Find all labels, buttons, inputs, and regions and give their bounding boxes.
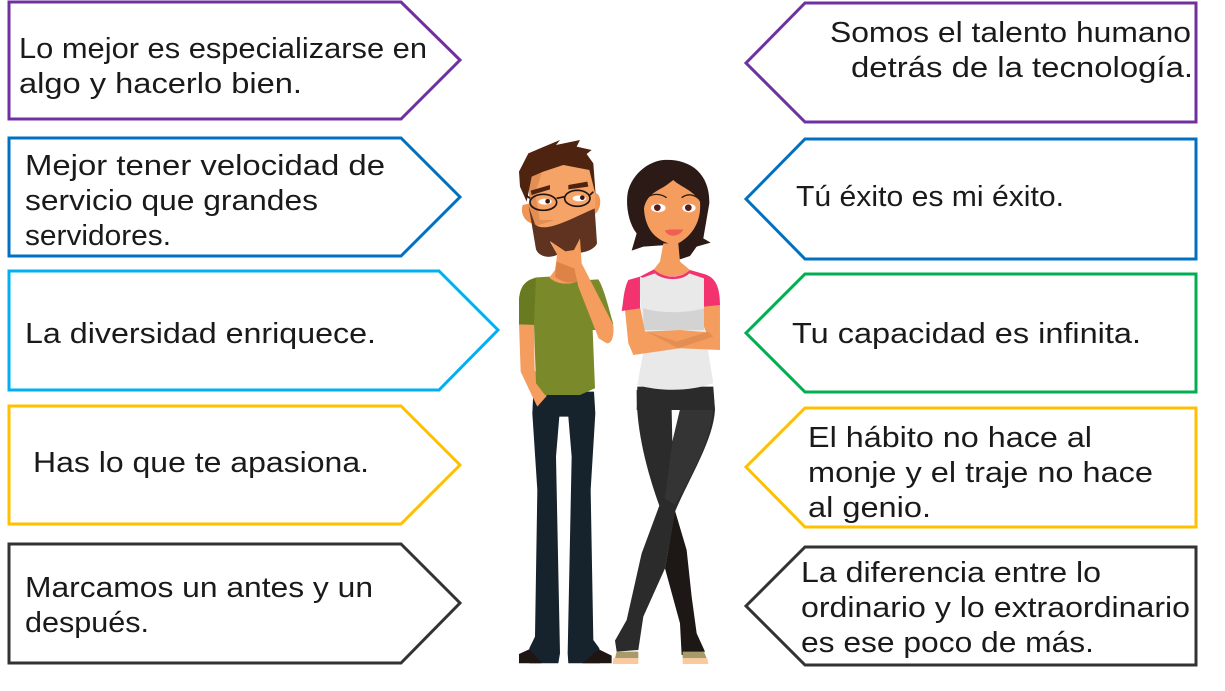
illustration: man with beard	[519, 140, 614, 663]
panel: talento humano arrow: Somos el talento humano	[830, 17, 1191, 49]
panel: antes y despues arrow	[9, 544, 460, 663]
panel: extraordinario arrow: La diferencia entre lo	[801, 557, 1101, 589]
panel: velocidad arrow: Mejor tener velocidad de	[25, 150, 385, 182]
panel: antes y despues arrow: después.	[25, 607, 149, 639]
panel: tu exito arrow	[746, 139, 1196, 259]
illustration: woman with crossed arms	[613, 160, 720, 664]
panel: talento humano arrow: detrás de la tecnología.	[851, 52, 1193, 84]
panel: habito arrow	[746, 408, 1196, 527]
panel: extraordinario arrow: ordinario y lo extraordinario	[801, 592, 1190, 624]
panel: capacidad arrow	[746, 274, 1196, 392]
panel: velocidad arrow: servidores.	[25, 220, 171, 252]
panel: habito arrow: El hábito no hace al	[808, 422, 1092, 454]
panel: velocidad arrow: servicio que grandes	[25, 185, 318, 217]
panel: capacidad arrow: Tu capacidad es infinita.	[792, 318, 1141, 350]
panel: extraordinario arrow	[746, 547, 1196, 665]
panel: habito arrow: al genio.	[808, 492, 931, 524]
panel: pasion arrow	[9, 406, 460, 524]
panel: velocidad arrow	[9, 138, 460, 256]
panel: pasion arrow: Has lo que te apasiona.	[33, 447, 369, 479]
panel: diversidad arrow: La diversidad enriquece.	[25, 318, 376, 350]
panel: talento humano arrow	[746, 3, 1196, 122]
panel: habito arrow: monje y el traje no hace	[808, 457, 1153, 489]
panel: especializarse arrow: Lo mejor es especializarse en	[19, 33, 427, 65]
panel: diversidad arrow	[9, 271, 498, 390]
panel: especializarse arrow	[9, 2, 460, 119]
panel: tu exito arrow: Tú éxito es mi éxito.	[796, 181, 1064, 213]
panel: extraordinario arrow: es ese poco de más.	[801, 627, 1094, 659]
panel: antes y despues arrow: Marcamos un antes y un	[25, 572, 373, 604]
panel: especializarse arrow: algo y hacerlo bien.	[19, 68, 302, 100]
